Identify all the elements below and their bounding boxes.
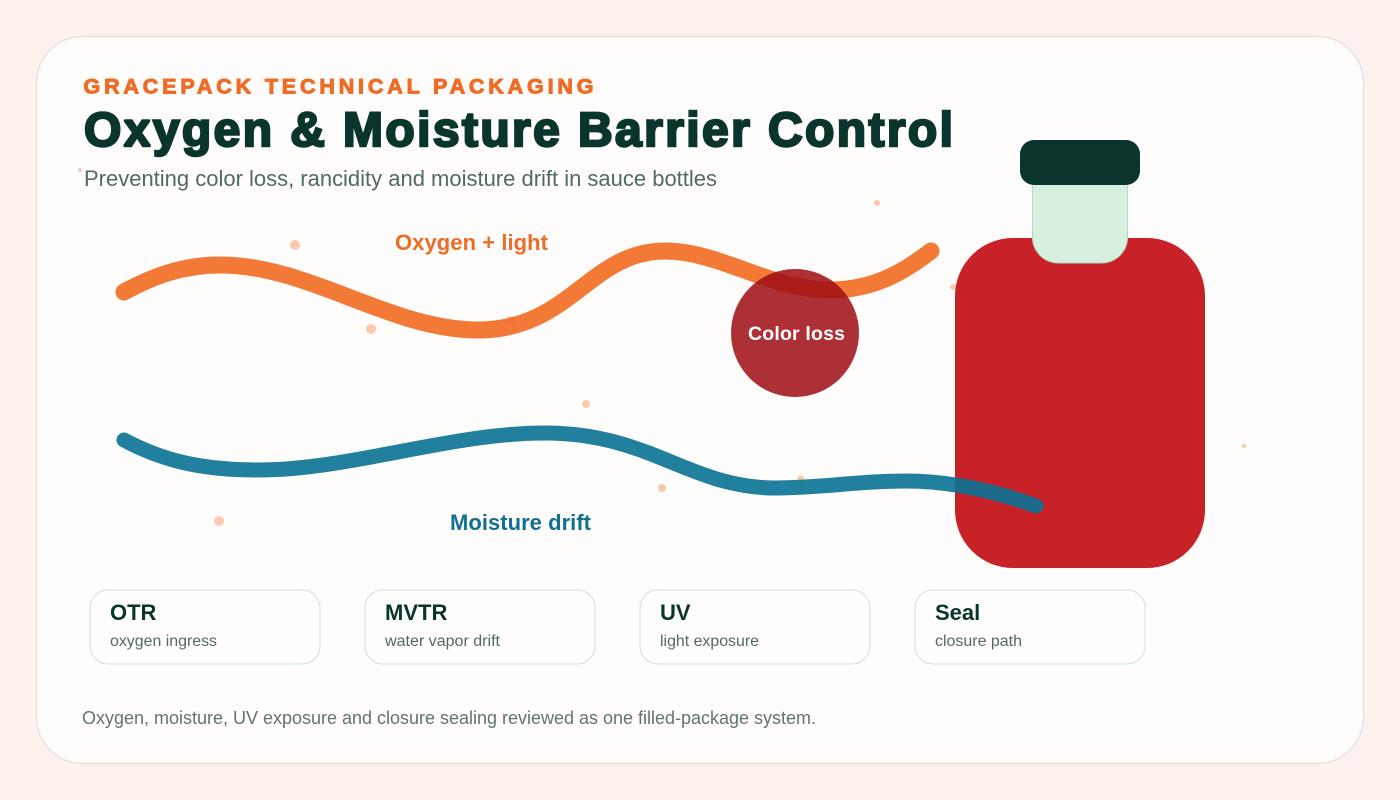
card: Seal [915,590,1145,664]
oxygen and light path [124,251,931,330]
card: UV: UV [660,600,691,625]
card: OTR [90,590,320,664]
card: Seal: closure path [935,633,1022,650]
card: UV [640,590,870,664]
card: OTR: oxygen ingress [110,633,217,650]
card: UV: light exposure [660,633,759,650]
eyebrow: GRACEPACK TECHNICAL PACKAGING [84,74,594,98]
color loss callout [731,269,859,397]
moisture label: Moisture drift [450,510,592,535]
title: Oxygen & Moisture Barrier Control [84,104,953,157]
card: Seal: Seal [935,600,980,625]
bottle body [955,238,1205,568]
background particles [78,168,1246,526]
card: MVTR: MVTR [385,600,447,625]
card: MVTR: water vapor drift [384,633,501,650]
bottle neck [1032,160,1128,263]
bottle cap [1020,140,1140,185]
card: MVTR [365,590,595,664]
footer note: Oxygen, moisture, UV exposure and closure sealing reviewed as one filled-package system. [82,708,816,728]
moisture drift path [124,433,1036,506]
color loss callout: Color loss [748,323,845,345]
subtitle: Preventing color loss, rancidity and moisture drift in sauce bottles [84,166,717,191]
oxygen label: Oxygen + light [395,230,549,255]
bottle [955,140,1205,568]
card: OTR: OTR [110,600,157,625]
